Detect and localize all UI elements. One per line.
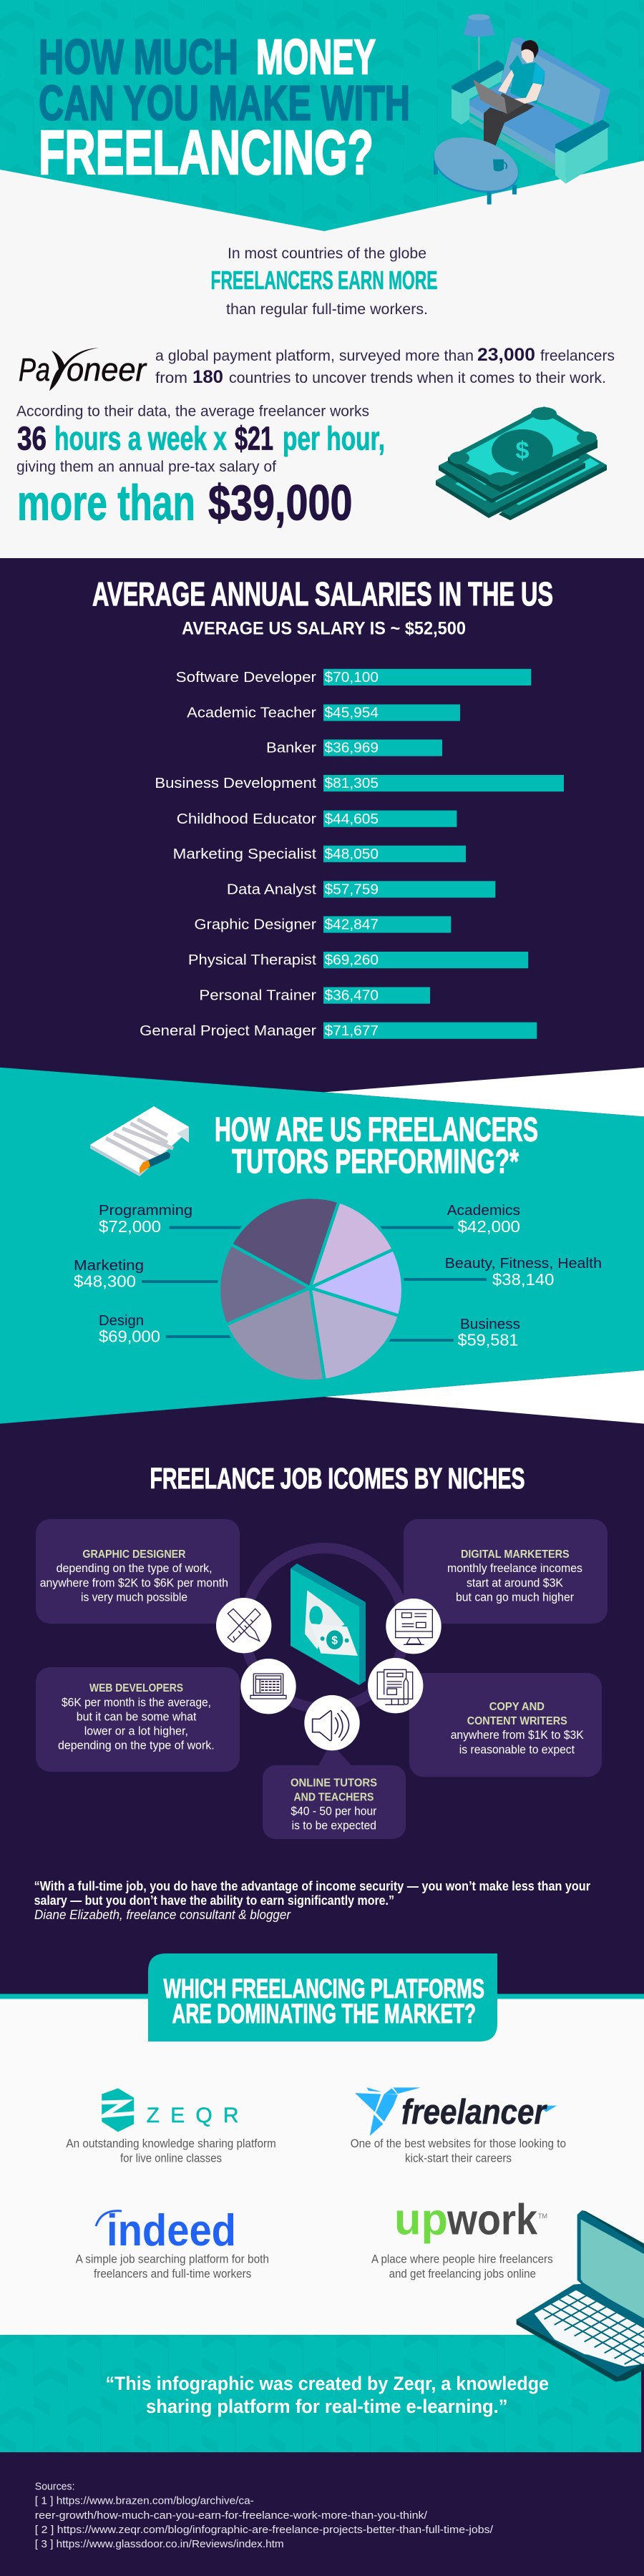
pie labels: $38,140 — [492, 1270, 554, 1289]
logo: Zeqr: ZEQR — [147, 2104, 239, 2127]
panel: digital marketers: start at around $3K — [467, 1576, 563, 1589]
slice: Academics — [310, 1201, 394, 1288]
text: Payoneer survey: countries to uncover trends when it comes to their work. — [229, 370, 606, 386]
text: freelancer description: kick-start their careers — [405, 2152, 512, 2165]
text: sources: reer-growth/how-much-can-you-earn-for-freelance-work-more-than-you-think/ — [35, 2509, 428, 2522]
bar: Academic Teacher: $45,954 — [325, 704, 379, 721]
text: upwork description — [371, 2253, 553, 2280]
title — [39, 29, 410, 187]
panel: platforms background — [0, 1994, 644, 2335]
icon: laptop with code — [240, 1659, 296, 1714]
panel: web developers: but it can be some what — [77, 1709, 197, 1723]
bar: Personal Trainer: $36,470 — [325, 987, 379, 1004]
logo: Payoneer: oneer — [67, 351, 147, 388]
title: CAN YOU MAKE WITH — [39, 76, 410, 130]
text: hours and salary calculation: According to their data, the average freelancer works — [16, 404, 369, 419]
text: indeed description — [76, 2253, 269, 2280]
bar: Physical Therapist: Physical Therapist — [188, 952, 316, 968]
quote: credit to Zeqr — [106, 2373, 549, 2417]
bar: Marketing Specialist: $48,050 — [325, 846, 379, 862]
bar: Business Development: Business Development — [155, 775, 316, 791]
panel: tutors band background — [0, 1068, 644, 1424]
bar: Personal Trainer: Personal Trainer — [199, 987, 316, 1004]
panel: copy and content writers: COPY AND — [489, 1701, 545, 1713]
panel: graphic designer: is very much possible — [81, 1590, 187, 1604]
panel: copy and content writers: anywhere from $1K to $3K — [451, 1728, 584, 1742]
bar: Marketing Specialist — [173, 846, 466, 862]
pie labels: $48,300 — [74, 1272, 136, 1291]
text: upwork description: A place where people hire freelancers — [371, 2253, 553, 2266]
heading: average annual salaries — [92, 575, 553, 638]
slice: Design — [226, 1288, 325, 1381]
slice: Beauty, Fitness, Health — [310, 1249, 403, 1316]
logo: indeed: indeed — [107, 2206, 236, 2255]
quote: Diane Elizabeth: Diane Elizabeth, freelance consultant & blogger — [34, 1908, 291, 1922]
text: indeed description: freelancers and full-time workers — [94, 2268, 251, 2280]
text: hours and salary calculation — [16, 404, 385, 531]
text: freelancer description — [351, 2137, 566, 2165]
logo: upwork: TM — [538, 2212, 547, 2220]
text: Zeqr description — [66, 2137, 276, 2165]
pie labels: $72,000 — [99, 1217, 161, 1236]
icon: floor lamp — [463, 14, 495, 70]
panel: online tutors and teachers: is to be expected — [292, 1819, 376, 1833]
heading: how are freelancers tutors performing — [215, 1111, 538, 1180]
pie labels: $69,000 — [99, 1327, 160, 1346]
text: sources — [35, 2481, 494, 2550]
slice: Programming — [231, 1197, 339, 1288]
title: MONEY — [256, 29, 376, 84]
text: freelancer description: One of the best websites for those looking to — [351, 2137, 566, 2150]
icon: person using laptop — [473, 40, 545, 147]
panel: copy and content writers: CONTENT WRITERS — [467, 1715, 567, 1727]
icon: laptop — [517, 2210, 644, 2381]
intro statement — [210, 245, 438, 318]
text: hours and salary calculation: $39,000 — [208, 475, 352, 531]
panel: web developers: WEB DEVELOPERS — [89, 1682, 183, 1694]
panel: digital marketers — [404, 1519, 608, 1624]
logo: Payoneer: Pa — [19, 351, 50, 388]
icon: stack of dollar bills: $ — [516, 437, 530, 464]
panel: graphic designer: anywhere from $2K to $6K per month — [40, 1576, 228, 1589]
text: hours and salary calculation: giving them an annual pre-tax salary of — [16, 459, 276, 475]
logo: Zeqr — [102, 2088, 239, 2132]
panel: web developers: lower or a lot higher, — [84, 1724, 188, 1737]
text: hours and salary calculation: hours a week x — [54, 419, 227, 457]
bar: Physical Therapist: $69,260 — [325, 952, 379, 968]
text: Zeqr description: for live online classes — [120, 2152, 222, 2165]
pie labels: $59,581 — [458, 1331, 518, 1350]
heading: average annual salaries: AVERAGE US SALARY IS ~ $52,500 — [182, 618, 466, 638]
pie labels — [74, 1203, 602, 1350]
intro statement: FREELANCERS EARN MORE — [210, 265, 438, 295]
text: Payoneer survey: a global payment platform, surveyed more than — [155, 348, 474, 364]
text: Payoneer survey — [155, 345, 615, 387]
quote: credit to Zeqr: “This infographic was created by Zeqr, a knowledge — [106, 2373, 549, 2394]
panel: web developers: $6K per month is the average, — [62, 1695, 211, 1709]
logo: upwork: work — [447, 2195, 538, 2244]
text: Payoneer survey: 23,000 — [477, 345, 535, 365]
intro statement: In most countries of the globe — [228, 245, 426, 262]
quote: Diane Elizabeth: salary — but you don’t have the ability to earn significantly more.” — [34, 1893, 394, 1908]
panel: web developers: depending on the type of work. — [58, 1739, 215, 1752]
intro statement: than regular full-time workers. — [226, 301, 428, 318]
panel: online tutors and teachers: ONLINE TUTORS — [291, 1777, 377, 1789]
bar: Data Analyst — [227, 881, 495, 897]
pie labels: Design — [99, 1313, 144, 1329]
icon: speaker — [304, 1695, 360, 1750]
panel: online tutors and teachers — [263, 1750, 406, 1839]
icon: coffee table with mug — [427, 128, 525, 205]
logo: freelancer — [355, 2087, 557, 2136]
text: Payoneer survey: 180 — [192, 367, 223, 387]
heading tab: which freelancing platforms: ARE DOMINATING THE MARKET? — [172, 1999, 476, 2029]
panel: hero banner — [0, 0, 644, 231]
bar: Banker: $36,969 — [325, 740, 379, 756]
quote: Diane Elizabeth: “With a full-time job, you do have the advantage of income security — you won’t make less than your — [34, 1879, 590, 1893]
bar: Marketing Specialist: Marketing Specialist — [173, 846, 316, 862]
panel: digital marketers: DIGITAL MARKETERS — [461, 1548, 570, 1561]
panel: copy and content writers: is reasonable to expect — [459, 1742, 575, 1756]
logo: upwork: up — [394, 2195, 448, 2244]
title: HOW MUCH — [39, 29, 238, 84]
pie labels: Programming — [99, 1203, 192, 1219]
panel: credit banner — [0, 2335, 641, 2452]
bar: Academic Teacher — [187, 704, 460, 721]
text: sources: [ 1 ] https://www.brazen.com/blog/archive/ca- — [35, 2495, 254, 2507]
text: upwork description: and get freelancing jobs online — [389, 2268, 536, 2280]
logo: upwork — [394, 2195, 547, 2244]
bar: Childhood Educator: $44,605 — [325, 811, 379, 827]
illustration: freelancer on sofa with laptop — [427, 14, 610, 205]
heading tab: which freelancing platforms: WHICH FREELANCING PLATFORMS — [163, 1974, 484, 2004]
quote: credit to Zeqr: sharing platform for real-time e-learning.” — [146, 2396, 508, 2417]
bar: Personal Trainer — [199, 987, 430, 1004]
bar: Business Development — [155, 775, 564, 791]
icon: stack of dollar bills — [436, 406, 607, 520]
bar: General Project Manager: $71,677 — [325, 1023, 379, 1039]
bar: Banker — [266, 740, 442, 756]
icon: document and pen — [90, 1106, 189, 1176]
text: hours and salary calculation: more than — [17, 475, 195, 531]
heading tab: which freelancing platforms — [148, 1953, 497, 2041]
ring behind central icon — [245, 1548, 405, 1709]
quote: Diane Elizabeth — [34, 1879, 590, 1922]
slice: Marketing — [219, 1244, 310, 1324]
logo: freelancer: freelancer — [401, 2093, 548, 2132]
bar: Graphic Designer — [195, 916, 451, 933]
text: hours and salary calculation: $21 — [235, 419, 273, 457]
icon: money board: $ — [331, 1634, 338, 1646]
panel: copy and content writers — [409, 1673, 602, 1777]
text: indeed description: A simple job searching platform for both — [76, 2253, 269, 2266]
icon: monitor with layout — [386, 1599, 441, 1654]
panel: digital marketers: monthly freelance incomes — [447, 1561, 582, 1575]
icon: sofa — [452, 37, 610, 184]
panel: online tutors and teachers: $40 - 50 per hour — [291, 1805, 377, 1818]
icon: article and pencil on monitor — [368, 1658, 423, 1713]
bar: Data Analyst: Data Analyst — [227, 882, 316, 897]
panel: graphic designer: depending on the type of work, — [57, 1561, 213, 1575]
icon: pencil and ruler — [216, 1598, 271, 1653]
bar: Graphic Designer: $42,847 — [325, 917, 379, 933]
pie chart: tutor earnings by subject — [142, 1197, 487, 1381]
bar: Software Developer: Software Developer — [176, 669, 316, 686]
logo: Payoneer — [19, 348, 147, 391]
title: FREELANCING? — [39, 118, 374, 187]
bar: Data Analyst: $57,759 — [325, 882, 379, 897]
text: sources: Sources: — [35, 2481, 74, 2493]
heading: how are freelancers tutors performing: TUTORS PERFORMING?* — [232, 1142, 519, 1180]
panel: intro background — [0, 0, 644, 558]
text: Payoneer survey: from — [155, 370, 187, 386]
text: Payoneer survey: freelancers — [540, 348, 615, 364]
icon: money board — [291, 1563, 366, 1685]
text: hours and salary calculation: per hour, — [283, 419, 385, 457]
bar: Childhood Educator — [177, 811, 457, 827]
bar: Banker: Banker — [266, 740, 316, 756]
bar: Physical Therapist — [188, 952, 528, 968]
slice: Business — [310, 1288, 399, 1380]
bar: General Project Manager: General Project Manager — [140, 1023, 316, 1039]
pie labels: $42,000 — [458, 1217, 520, 1236]
text: hours and salary calculation: 36 — [17, 419, 47, 457]
pie labels: Academics — [447, 1203, 520, 1219]
text: sources: [ 3 ] https://www.glassdoor.co.in/Reviews/index.htm — [35, 2538, 284, 2550]
text: sources: [ 2 ] https://www.zeqr.com/blog/infographic-are-freelance-projects-better-than-full-time-jobs/ — [35, 2524, 494, 2536]
bar: Business Development: $81,305 — [325, 775, 379, 791]
bar: Childhood Educator: Childhood Educator — [177, 811, 316, 827]
panel: graphic designer: GRAPHIC DESIGNER — [82, 1548, 186, 1561]
bar: Academic Teacher: Academic Teacher — [187, 704, 316, 721]
panel: digital marketers: but can go much higher — [456, 1590, 574, 1604]
pie labels: Beauty, Fitness, Health — [445, 1256, 602, 1272]
bar: Graphic Designer: Graphic Designer — [195, 917, 316, 933]
panel: online tutors and teachers: AND TEACHERS — [293, 1791, 374, 1803]
pie labels: Business — [460, 1317, 520, 1332]
bar chart: salaries by job — [140, 669, 564, 1039]
bar: Software Developer: $70,100 — [325, 669, 379, 686]
pie labels: Marketing — [74, 1258, 144, 1274]
text: Zeqr description: An outstanding knowledge sharing platform — [66, 2137, 276, 2150]
panel: graphic designer — [36, 1519, 240, 1624]
panel: web developers — [36, 1667, 240, 1772]
bar: Software Developer — [176, 669, 531, 686]
bar: General Project Manager — [140, 1023, 537, 1039]
